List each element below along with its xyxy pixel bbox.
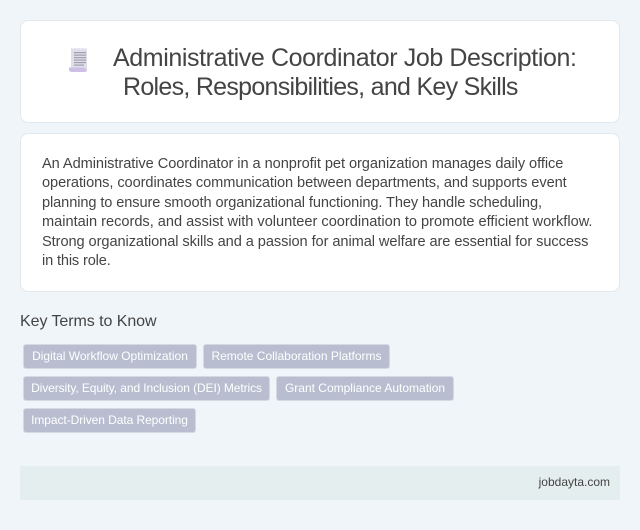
text block: description: planning to ensure smooth organizational functioning. They handle scheduling, <box>42 195 542 211</box>
tag: Digital Workflow Optimization <box>32 349 188 363</box>
tag: Grant Compliance Automation <box>285 381 445 395</box>
footer bar <box>20 466 620 500</box>
title: Roles, Responsibilities, and Key Skills <box>123 73 518 101</box>
text block: description: An Administrative Coordinator in a nonprofit pet organization manages daily office <box>42 156 563 172</box>
tag <box>203 344 390 369</box>
tag: Diversity, Equity, and Inclusion (DEI) Metrics <box>31 381 262 395</box>
title <box>113 44 577 101</box>
heading: key terms: Key Terms to Know <box>20 313 157 330</box>
text block: description: operations, coordinates communication between departments, and supports event <box>42 175 567 191</box>
footer source: jobdayta.com <box>539 475 610 489</box>
tag list <box>23 344 454 433</box>
tag <box>23 376 270 401</box>
panel: title header <box>20 20 620 123</box>
icon: document scroll <box>69 48 87 72</box>
text block: description: in this role. <box>42 253 111 269</box>
text block: description <box>42 156 592 269</box>
tag <box>276 376 454 401</box>
tag: Impact-Driven Data Reporting <box>31 413 188 427</box>
tag <box>23 408 196 433</box>
title: Administrative Coordinator Job Description: <box>113 44 577 72</box>
tag <box>23 344 197 369</box>
text block: description: maintain records, and assist with volunteer coordination to promote efficient workflow. <box>42 214 592 230</box>
panel: description <box>20 133 620 292</box>
text block: description: Strong organizational skills and a passion for animal welfare are essential for success <box>42 234 588 250</box>
tag: Remote Collaboration Platforms <box>211 349 382 363</box>
